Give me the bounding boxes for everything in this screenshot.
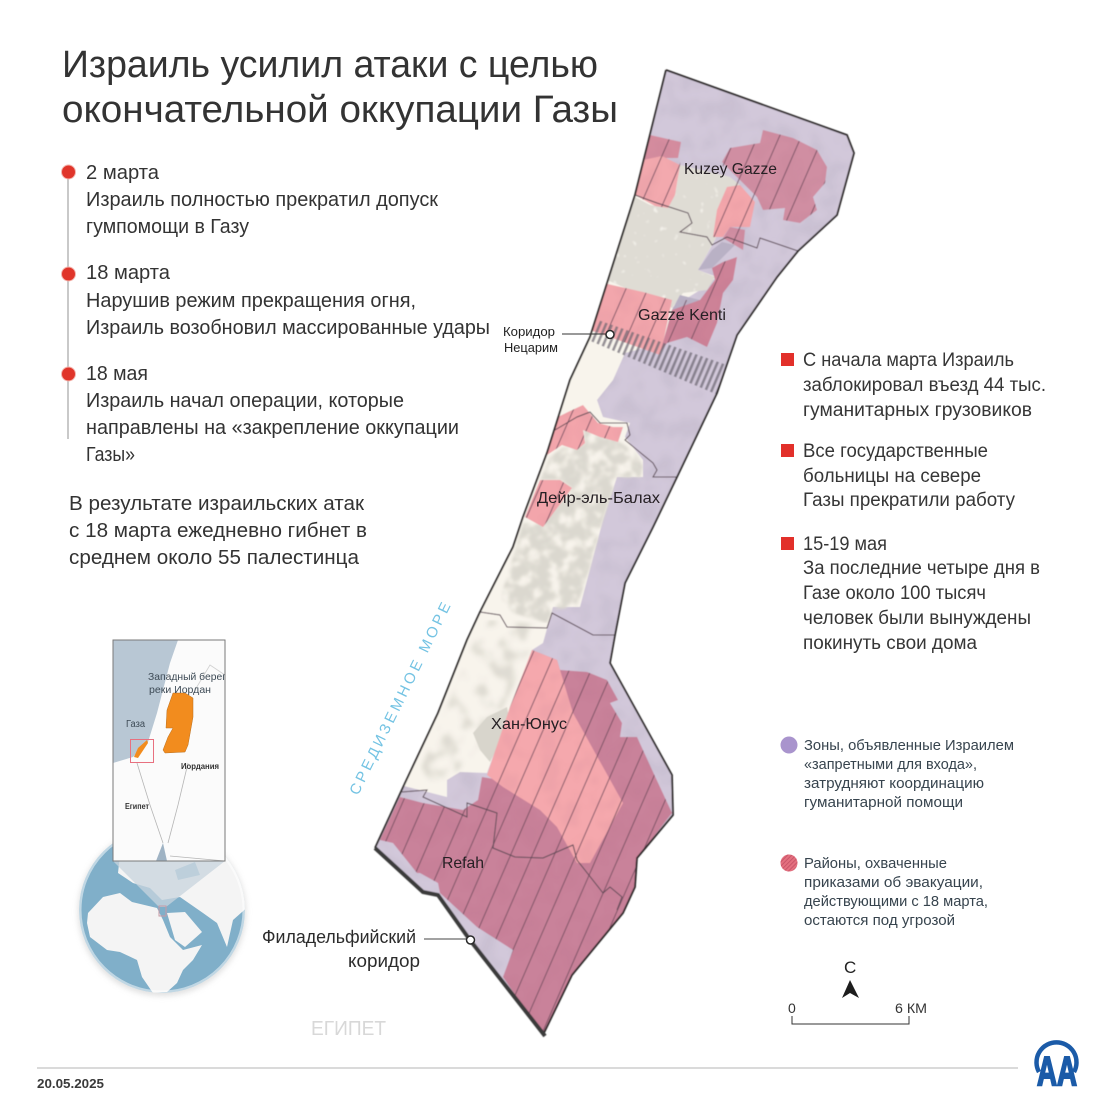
legend: no-go zones: гуманитарной помощи	[804, 795, 963, 811]
text block: casualties: среднем около 55 палестинца	[69, 547, 360, 569]
area: evacuation zone north-east	[722, 130, 827, 223]
West Bank	[163, 693, 193, 753]
label: Mediterranean Sea: СРЕДИЗЕМНОЕ МОРЕ	[346, 600, 455, 798]
text block: casualties	[69, 493, 367, 569]
fact: displacement: покинуть свои дома	[803, 633, 977, 654]
locator square	[159, 906, 166, 916]
event: 2 марта: Израиль полностью прекратил допуск	[86, 189, 438, 211]
event: 18 мая: Израиль начал операции, которые	[86, 390, 404, 412]
legend: evacuation areas	[780, 854, 988, 929]
inset labels: Иордания	[181, 762, 219, 771]
legend: no-go zones: «запретными для входа»,	[804, 757, 977, 773]
fact: trucks: гуманитарных грузовиков	[803, 400, 1032, 421]
legend: evacuation areas: приказами об эвакуации,	[804, 875, 983, 891]
callout: Philadelphi corridor: Филадельфийский	[262, 927, 416, 947]
inset labels: Газа	[126, 719, 145, 730]
fact: trucks: заблокировал въезд 44 тыс.	[803, 375, 1046, 396]
text block: casualties: с 18 марта ежедневно гибнет в	[69, 520, 367, 542]
area: evacuation zone Khan Younis light	[487, 650, 623, 863]
legend: evacuation areas: Районы, охваченные	[804, 856, 947, 872]
area: evacuation zone south dark	[380, 650, 672, 1035]
event: 18 марта: Израиль возобновил массированные удары	[86, 317, 490, 339]
area: evacuation zone Gaza city	[590, 283, 672, 355]
land: Africa	[87, 893, 202, 993]
event: 18 марта: Нарушив режим прекращения огня,	[86, 290, 416, 312]
legend: no-go zones: Зоны, объявленные Израилем	[804, 738, 1014, 754]
fact: trucks: С начала марта Израиль	[803, 350, 1014, 371]
area: built-up north	[600, 165, 740, 308]
Philadelphi border line	[375, 848, 545, 1036]
legend: no-go zones: затрудняют координацию	[804, 776, 984, 792]
scale bar	[788, 1000, 927, 1024]
north arrow: С	[844, 958, 856, 977]
area: evacuation zones Deir al-Balah	[547, 405, 623, 455]
area: cream coastal land	[404, 196, 715, 798]
scale bar: 6 КМ	[895, 1000, 927, 1016]
inset labels: Западный берег	[148, 671, 226, 683]
inset labels: реки Иордан	[149, 684, 211, 696]
event: 18 марта: 18 марта	[86, 262, 171, 284]
pattern: evacuation lines	[385, 134, 826, 1032]
legend: evacuation areas: остаются под угрозой	[804, 913, 955, 929]
event: 2 марта: 2 марта	[86, 162, 160, 184]
fact: hospitals	[781, 441, 1015, 511]
logo: AA	[1036, 1042, 1077, 1094]
pattern: Netzarim corridor hatch	[591, 320, 724, 394]
timeline	[62, 162, 490, 466]
area: built-up centre	[500, 423, 643, 623]
land: Arabia	[167, 912, 202, 947]
fact: displacement: Газе около 100 тысяч	[803, 583, 986, 604]
callout: Netzarim corridor: Коридор	[503, 325, 555, 339]
event: 18 мая: Газы»	[86, 444, 135, 466]
area: darker purple patches	[672, 294, 699, 310]
fact: hospitals: Газы прекратили работу	[803, 490, 1015, 511]
land: Europe and Asia	[118, 857, 245, 947]
legend: evacuation areas: действующими с 18 марта,	[804, 894, 988, 910]
area: evacuation zone north-west	[644, 134, 682, 160]
logo: AA: AA	[1037, 1048, 1077, 1094]
callout: Philadelphi corridor	[262, 927, 474, 971]
text block: casualties: В результате израильских атак	[69, 493, 364, 515]
inset labels	[125, 671, 226, 811]
date: 20.05.2025	[37, 1077, 104, 1091]
footer divider	[37, 1068, 1018, 1069]
event: 18 мая: 18 мая	[86, 363, 148, 385]
event: 18 марта	[62, 262, 490, 339]
fact: displacement: человек были вынуждены	[803, 608, 1031, 629]
scale bar: 0	[788, 1000, 796, 1016]
event: 2 марта: гумпомощи в Газу	[86, 216, 249, 238]
map labels: Kuzey Gazze	[684, 161, 777, 178]
map: Gaza strip	[360, 60, 870, 1050]
event: 18 мая: направлены на «закрепление оккупации	[86, 417, 459, 439]
water: seas	[175, 862, 200, 880]
water: gulf	[156, 843, 167, 861]
fact: trucks	[781, 350, 1046, 421]
event: 18 мая	[62, 363, 459, 466]
area: built-up south	[421, 620, 531, 779]
fact: displacement	[781, 534, 1040, 654]
map labels	[442, 161, 777, 872]
legend: no-go zones	[780, 736, 1014, 811]
globe	[78, 827, 250, 996]
sea	[113, 640, 178, 763]
map labels: Хан-Юнус	[491, 716, 567, 733]
event: 2 марта	[62, 162, 438, 238]
map labels: Дейр-эль-Балах	[537, 490, 660, 507]
locator rectangle	[130, 740, 154, 762]
fact: displacement: 15-19 мая	[803, 534, 887, 555]
fact: hospitals: Все государственные	[803, 441, 988, 462]
inset map	[113, 640, 226, 861]
fact: displacement: За последние четыре дня в	[803, 558, 1040, 579]
legend	[780, 736, 1014, 929]
north arrow	[842, 958, 859, 998]
title: окончательной оккупации Газы	[62, 89, 618, 131]
title	[62, 44, 618, 131]
governorate borders	[402, 195, 798, 910]
map outline	[375, 70, 854, 1035]
fact: hospitals: больницы на севере	[803, 466, 981, 487]
callout: Philadelphi corridor: коридор	[348, 951, 420, 971]
inset projection wedge	[113, 861, 225, 907]
callout: Netzarim corridor: Нецарим	[504, 341, 558, 355]
map labels: Gazze Kenti	[638, 307, 726, 324]
inset labels: Египет	[125, 802, 149, 811]
callout: Netzarim corridor	[503, 325, 614, 355]
label: Egypt: ЕГИПЕТ	[311, 1018, 386, 1040]
map labels: Refah	[442, 855, 484, 872]
title: Израиль усилил атаки с целью	[62, 44, 598, 86]
key facts	[781, 350, 1046, 654]
Gaza on inset	[134, 740, 148, 758]
